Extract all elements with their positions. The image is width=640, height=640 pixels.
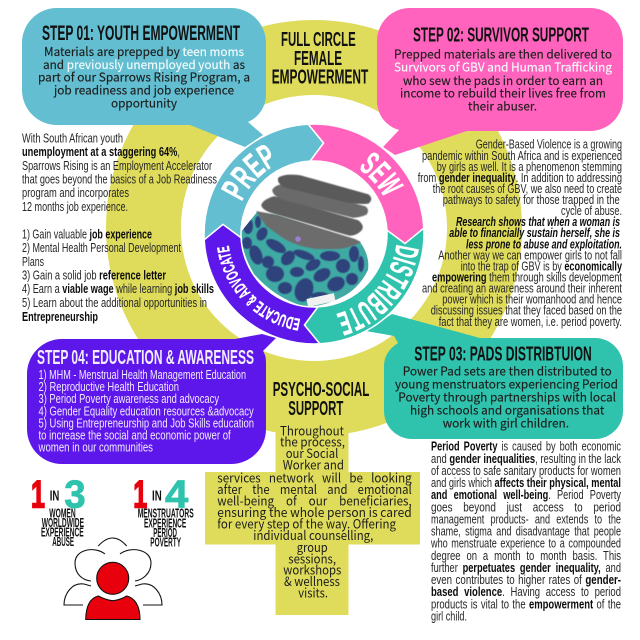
text block: psycho-social support: sessions, (288, 548, 336, 567)
panel: step 01 youth empowerment (22, 8, 266, 147)
photo: reusable period pads (238, 175, 373, 310)
text block: psycho-social support: ensuring the whole person is cared (217, 502, 412, 521)
text block: gender-based violence: into the trap of GBV is by economically (461, 259, 622, 273)
text block: psycho-social support: workshops (283, 560, 341, 579)
arrow: educate and advocate (204, 224, 320, 344)
text block: youth unemployment: that goes beyond the basics of a Job Readiness (22, 172, 217, 186)
grey pad flap (256, 211, 361, 249)
step 01 body: and previously unemployed youth as (43, 56, 245, 73)
text block: psycho-social support (217, 420, 412, 601)
pad snap button (295, 236, 301, 242)
caption: women worldwide experience abuse: WORLDWIDE (42, 516, 84, 530)
step 02 body: Prepped materials are then delivered to (394, 46, 612, 63)
step 04 list: to increase the social and economic power of (38, 428, 231, 442)
step 01 body: Materials are prepped by teen moms (44, 43, 244, 60)
caption: women worldwide experience abuse: EXPERIENCE (41, 526, 84, 540)
text block: youth unemployment: unemployment at a staggering 64%, (22, 145, 180, 159)
text block: period poverty: even contributes to higher rates of gender- (431, 573, 621, 587)
step 01 body (38, 43, 250, 112)
purple speech bubble (27, 334, 276, 464)
text block: youth unemployment (22, 132, 217, 324)
step 02 body: income to rebuild their lives free from (400, 85, 606, 102)
icon: group of people with one highlighted (64, 538, 162, 620)
caption: menstruators experience period poverty: PERIOD (153, 526, 177, 540)
caption: menstruators experience period poverty: EXPERIENCE (144, 516, 186, 530)
ring label: educate and advocate: EDUCATE & ADVOCATE (217, 246, 300, 331)
text block: youth unemployment: 5) Learn about the additional opportunities in (22, 296, 207, 310)
ring label: sew: SEW (360, 152, 404, 196)
step 03 body: Power Pad sets are then distributed to (403, 363, 612, 380)
step 03 body: high schools and organisations that (410, 402, 605, 419)
text block: period poverty (430, 440, 622, 624)
arrow: prep (204, 124, 324, 240)
number: 1 in 3 (31, 474, 86, 517)
step 04 heading: STEP 04: EDUCATION & AWARENESS (37, 346, 254, 369)
step 02 body: their abuser. (468, 98, 537, 115)
number: 1 in 3: 3 (64, 474, 86, 517)
step 01 body: opportunity (111, 95, 178, 112)
text block: psycho-social support: services network will be looking (217, 468, 412, 487)
ring label: distribute: DISTRIBUTE (336, 244, 419, 336)
patterned teal pad wing (242, 212, 368, 306)
text block: youth unemployment: program and incorporates (22, 186, 129, 200)
text block: youth unemployment: 3) Gain a solid job reference letter (22, 268, 166, 282)
number: 1 in 3: 1 (31, 474, 45, 517)
step 02 body (394, 46, 612, 115)
step 02 body: who sew the pads in order to earn an (403, 72, 603, 89)
number: 1 in 3: IN (50, 488, 59, 505)
panel: step 03 pads distribution (366, 314, 623, 439)
title: full circle female empowerment (272, 29, 368, 88)
step 04 list: 5) Using Entrepreneurship and Job Skills education (38, 417, 254, 431)
panel: step 04 education and awareness (27, 334, 276, 464)
text block: psycho-social support: visits. (298, 582, 328, 601)
arrow: distribute (304, 228, 424, 344)
text block: psycho-social support: for every step of the way. Offering (217, 513, 396, 532)
text block: psycho-social support: group (297, 537, 328, 556)
number: 1 in 4 (133, 474, 189, 517)
heading: psycho-social support: SUPPORT (288, 398, 343, 420)
text block: psycho-social support: & wellness (284, 571, 340, 590)
text block: psycho-social support: individual counselling, (253, 525, 373, 544)
step 04 list (38, 368, 254, 455)
text block: psycho-social support: the process, (280, 432, 345, 451)
process ring (204, 124, 424, 344)
step 01 body: job readiness and job experience (53, 82, 234, 99)
step 01 body: part of our Sparrows Rising Program, a (38, 69, 250, 86)
arrow: sew (308, 124, 424, 244)
text block: psycho-social support: Worker and (283, 454, 344, 473)
step 03 body (395, 363, 618, 431)
female symbol: yellow ring and cross (144, 58, 484, 615)
text block: youth unemployment: 4) Earn a viable wage while learning job skills (22, 282, 214, 296)
text block: period poverty: girl child. (431, 610, 467, 624)
caption: menstruators experience period poverty: MENSTRUATORS (138, 507, 194, 521)
text block: period poverty: products is vital to the empowerment of the (431, 597, 621, 611)
text block: youth unemployment: Plans (22, 255, 44, 269)
text block: youth unemployment: 2) Mental Health Personal Development (22, 241, 181, 255)
text block: youth unemployment: 12 months job experience. (22, 200, 128, 214)
pad label (306, 293, 336, 307)
text block: psycho-social support: after the mental and emotional (217, 479, 412, 498)
step 01 heading: STEP 01: YOUTH EMPOWERMENT (42, 22, 240, 45)
ring label: prep: PREP (220, 145, 272, 201)
text block: psycho-social support: well-being of our beneficiaries, (217, 490, 412, 509)
text block: gender-based violence (418, 138, 622, 329)
pink speech bubble (377, 8, 623, 155)
step 04 list: 1) MHM - Menstrual Health Management Education (38, 368, 246, 382)
text block: youth unemployment: Sparrows Rising is an Employment Accelerator (22, 159, 212, 173)
text block: youth unemployment: Entrepreneurship (22, 310, 98, 324)
panel: step 02 survivor support (377, 8, 623, 155)
number: 1 in 4: 1 (133, 474, 147, 517)
caption: women worldwide experience abuse: ABUSE (52, 535, 74, 549)
caption: women worldwide experience abuse: WOMEN (49, 506, 76, 520)
teal speech bubble (366, 314, 623, 439)
heading: psycho-social support (273, 379, 369, 420)
step 04 list: 4) Gender Equality education resources &advocacy (38, 404, 254, 418)
statistic: 1 in 4 menstruators (133, 474, 194, 549)
caption: menstruators experience period poverty (138, 507, 194, 549)
text block: youth unemployment: With South African youth (22, 132, 123, 146)
number: 1 in 4: 4 (165, 474, 189, 517)
caption: women worldwide experience abuse (41, 506, 84, 549)
title: full circle female empowerment: FULL CIRCLE (281, 29, 356, 51)
title: full circle female empowerment: FEMALE (294, 48, 342, 70)
stacked grey pads (262, 175, 370, 235)
caption: menstruators experience period poverty: POVERTY (150, 535, 181, 549)
number: 1 in 4: IN (152, 488, 162, 505)
step 03 body: Poverty through partnerships with local (398, 389, 616, 406)
step 02 body: Survivors of GBV and Human Trafficking (394, 59, 612, 76)
text block: psycho-social support: Throughout (280, 420, 344, 439)
step 03 body: young menstruators experiencing Period (395, 376, 618, 393)
step 04 list: 2) Reproductive Health Education (38, 380, 179, 394)
blue speech bubble (22, 8, 266, 147)
text block: youth unemployment: 1) Gain valuable job experience (22, 228, 152, 242)
step 04 list: women in our communities (38, 441, 153, 455)
step 03 body: work with girl children. (443, 414, 569, 431)
text block: psycho-social support: our Social (286, 443, 338, 462)
title: full circle female empowerment: EMPOWERMENT (272, 66, 368, 88)
heading: psycho-social support: PSYCHO-SOCIAL (273, 379, 369, 401)
statistic: 1 in 3 women (31, 474, 86, 549)
step 04 list: 3) Period Poverty awareness and advocacy (38, 392, 220, 406)
